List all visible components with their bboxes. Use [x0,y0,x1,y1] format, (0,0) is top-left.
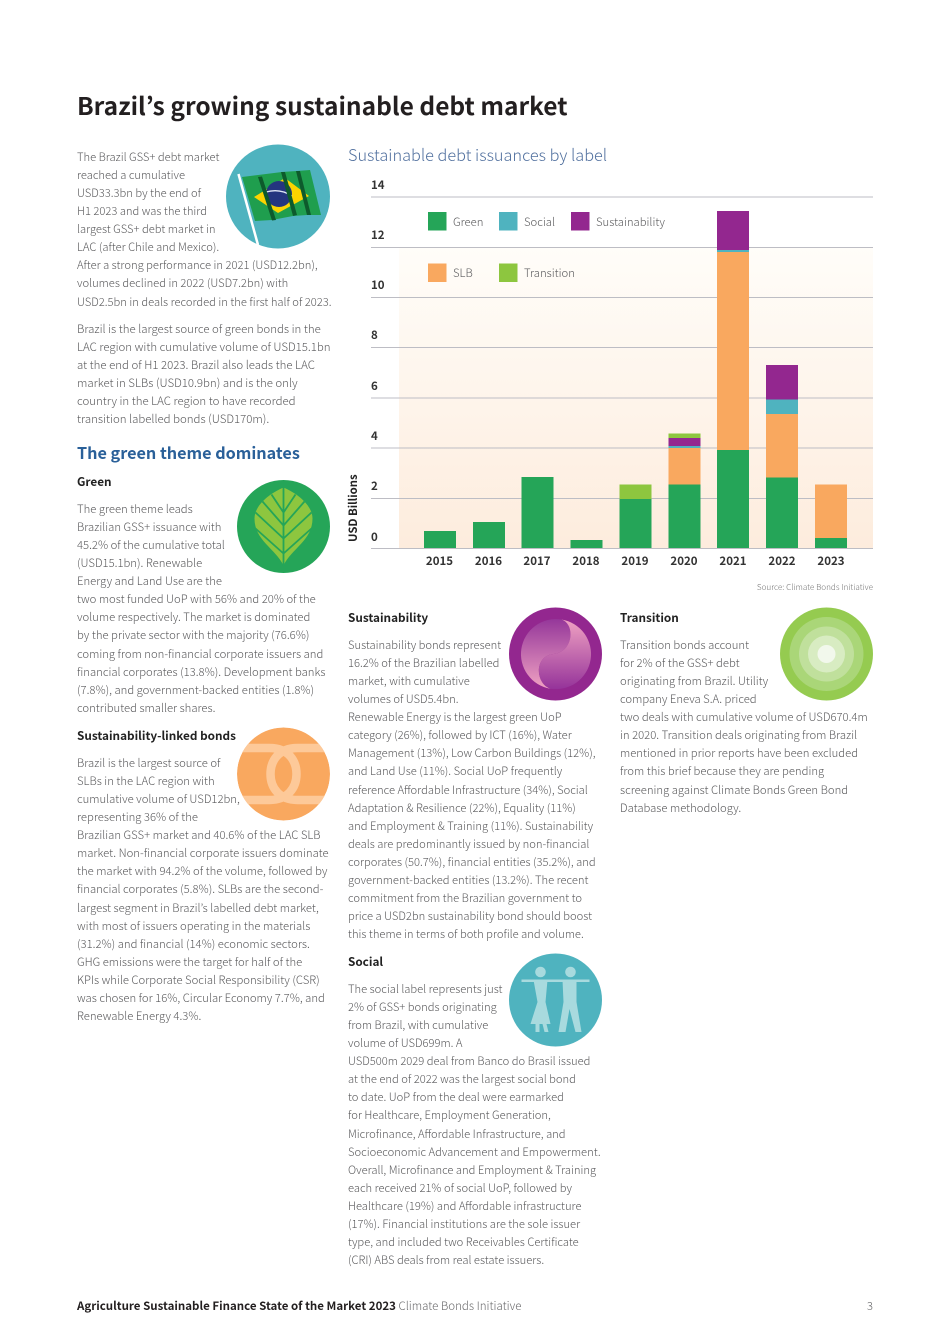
text: green: contributed smaller shares. [77,700,215,716]
intro paragraph 1: largest GSS+ debt market in [77,221,215,237]
legend: Transition [524,265,575,281]
x axis labels: 2016 [475,553,502,569]
x axis labels: 2021 [719,553,747,569]
intro paragraph 2 [77,321,331,427]
x axis labels: 2022 [768,553,796,569]
text: transition: from this brief because they are pending [620,763,824,779]
source note: Source: Climate Bonds Initiative [757,582,874,593]
text: sustainability: 16.2% of the Brazilian labelled [348,655,499,671]
x axis labels: 2020 [670,553,698,569]
text: SLB: KPIs while Corporate Social Responsibility (CSR) [77,972,320,988]
legend: Green [453,214,483,230]
text: social: each received 21% of social UoP, followed by [348,1180,572,1196]
title: Brazil’s growing sustainable debt market [77,88,568,122]
text: sustainability: Renewable Energy is the largest green UoP [348,709,562,725]
text: SLB: largest segment in Brazil’s labelled debt market, [77,900,319,916]
heading: transition: Transition [620,609,679,626]
y axis labels [371,177,385,545]
text: SLB: (31.2%) and financial (14%) economic sectors. [77,936,310,952]
intro paragraph 2: LAC region with cumulative volume of USD15.1bn [77,339,331,355]
intro paragraph 2: country in the LAC region to have recorded [77,393,296,409]
text: sustainability: corporates (50.7%), financial entities (35.2%), and [348,854,596,870]
text: SLB: GHG emissions were the target for half of the [77,954,302,970]
intro paragraph 1: The Brazil GSS+ debt market [77,149,219,165]
footer: Agriculture Sustainable Finance State of the Market 2023 Climate Bonds Initiative [77,1298,521,1314]
text: social: Socioeconomic Advancement and Empowerment. [348,1144,601,1160]
intro paragraph 1: LAC (after Chile and Mexico). [77,239,219,255]
heading: green theme: The green theme dominates [77,440,300,464]
y axis labels: 4 [371,428,378,444]
text: sustainability: government-backed entities (13.2%). The recent [348,872,588,888]
text: SLB: SLBs in the LAC region with [77,773,215,789]
bars [424,211,847,548]
text: SLB: financial corporates (5.8%). SLBs are the second- [77,881,323,897]
text: transition: company Eneva S.A. priced [620,691,757,707]
text: social: Healthcare (19%) and Affordable infrastructure [348,1198,581,1214]
text: sustainability: and Employment & Training (11%). Sustainability [348,818,593,834]
intro paragraph 1: H1 2023 and was the third [77,203,207,219]
x axis labels [426,553,845,569]
icon: sustainability yin-yang [509,608,602,700]
text: green: two most funded UoP with 56% and 20% of the [77,591,316,607]
text: social [348,981,601,1268]
intro paragraph 1: USD33.3bn by the end of [77,185,201,201]
text: social: 2% of GSS+ bonds originating [348,999,497,1015]
text: transition: Transition bonds account [620,637,749,653]
text: transition: Database methodology. [620,800,741,816]
x axis labels: 2015 [426,553,453,569]
text: sustainability: reference Affordable Infrastructure (34%), Social [348,782,588,798]
text: SLB: market. Non-financial corporate issuers dominate [77,845,329,861]
intro paragraph 2: market in SLBs (USD10.9bn) and is the only [77,375,298,391]
text: green: coming from non-financial corporate issuers and [77,646,323,662]
legend: Sustainability [596,214,665,230]
text: transition: two deals with cumulative volume of USD670.4m [620,709,868,725]
text: social: (CRI) ABS deals from real estate issuers. [348,1252,544,1268]
text: transition: in 2020. Transition deals originating from Brazil [620,727,857,743]
text: SLB: was chosen for 16%, Circular Economy 7.7%, and [77,990,325,1006]
text: transition: screening against Climate Bonds Green Bond [620,782,848,798]
y axis labels: 14 [371,177,385,193]
text: social: Microfinance, Affordable Infrastructure, and [348,1126,566,1142]
text: sustainability: deals are predominantly issued by non-financial [348,836,589,852]
icon: green leaf [237,480,330,573]
text: SLB: the market with 94.2% of the volume, followed by [77,863,327,879]
y axis labels: 10 [371,277,385,293]
text: social: USD500m 2029 deal from Banco do Brasil issued [348,1053,590,1069]
text: transition [620,637,868,816]
x axis labels: 2019 [621,553,649,569]
y axis labels: 0 [371,529,378,545]
text: sustainability: commitment from the Brazilian government to [348,890,582,906]
text: SLB: cumulative volume of USD12bn, [77,791,240,807]
legend: SLB [453,265,473,281]
text: SLB: representing 36% of the [77,809,198,825]
text: green: 45.2% of the cumulative total [77,537,225,553]
legend [428,212,665,282]
icon: transition rings [780,608,873,700]
text: social: for Healthcare, Employment Generation, [348,1107,551,1123]
text: green: by the private sector with the majority (76.6%) [77,627,309,643]
text: social: to date. UoP from the deal were earmarked [348,1089,564,1105]
icon: Brazil flag [226,144,330,248]
text: sustainability: volumes of USD5.4bn. [348,691,458,707]
text: green: (7.8%), and government-backed entities (1.8%) [77,682,314,698]
y axis title: USD Billions [345,474,361,542]
chart title: Sustainable debt issuances by label [348,142,607,166]
text: sustainability: Management (13%), Low Carbon Buildings (12%), [348,745,596,761]
page number: 3 [867,1298,873,1314]
text: SLB: Renewable Energy 4.3%. [77,1008,201,1024]
x axis labels: 2017 [523,553,551,569]
text: social: from Brazil, with cumulative [348,1017,488,1033]
text: SLB: Brazil is the largest source of [77,755,220,771]
text: transition: originating from Brazil. Utility [620,673,768,689]
text: sustainability: and Land Use (11%). Social UoP frequently [348,763,562,779]
text: sustainability: price a USD2bn sustainability bond should boost [348,908,592,924]
text: social: The social label represents just [348,981,502,997]
intro paragraph 1: USD2.5bn in deals recorded in the first half of 2023. [77,294,332,310]
text: green: (USD15.1bn). Renewable [77,555,202,571]
text: green: financial corporates (13.8%). Development banks [77,664,326,680]
text: green: volume respectively. The market is dominated [77,609,310,625]
intro paragraph 2: Brazil is the largest source of green bonds in the [77,321,321,337]
intro paragraph 1: reached a cumulative [77,167,185,183]
y axis labels: 2 [371,478,378,494]
text: SLB: with most of issuers operating in the materials [77,918,310,934]
text: sustainability: Sustainability bonds represent [348,637,501,653]
text: social: type, and included two Receivables Certificate [348,1234,579,1250]
text: sustainability: this theme in terms of both profile and volume. [348,926,584,942]
heading: sustainability: Sustainability [348,609,428,626]
legend: Social [524,214,555,230]
intro paragraph 1: volumes declined in 2022 (USD7.2bn) with [77,275,288,291]
text: social: Overall, Microfinance and Employment & Training [348,1162,596,1178]
y axis labels: 12 [371,227,385,243]
text: green [77,501,326,716]
text: sustainability: category (26%), followed by ICT (16%), Water [348,727,572,743]
text: green: The green theme leads [77,501,193,517]
text: sustainability: Adaptation & Resilience (22%), Equality (11%) [348,800,576,816]
heading: sustainability-linked bonds: Sustainability-linked bonds [77,727,236,744]
heading: green: Green [77,473,112,490]
stacked bar chart [226,144,873,1046]
x axis labels: 2023 [817,553,845,569]
y axis labels: 8 [371,327,378,343]
icon: social people [509,954,602,1046]
intro paragraph 2: at the end of H1 2023. Brazil also leads the LAC [77,357,315,373]
text: SLB [77,755,329,1024]
text: green: Energy and Land Use are the [77,573,222,589]
text: social: at the end of 2022 was the largest social bond [348,1071,576,1087]
y axis labels: 6 [371,378,378,394]
text: sustainability: market, with cumulative [348,673,470,689]
text: sustainability [348,637,596,942]
text: green: Brazilian GSS+ issuance with [77,519,221,535]
icon: SLB chain links [236,728,332,820]
x axis labels: 2018 [572,553,600,569]
text: SLB: Brazilian GSS+ market and 40.6% of the LAC SLB [77,827,321,843]
text: transition: mentioned in prior reports have been excluded [620,745,858,761]
heading: social: Social [348,953,383,970]
text: social: volume of USD699m. A [348,1035,462,1051]
intro paragraph 2: transition labelled bonds (USD170m). [77,411,269,427]
intro paragraph 1 [77,149,332,310]
intro paragraph 1: After a strong performance in 2021 (USD12.2bn), [77,257,318,273]
text: transition: for 2% of the GSS+ debt [620,655,740,671]
text: social: (17%). Financial institutions are the sole issuer [348,1216,580,1232]
